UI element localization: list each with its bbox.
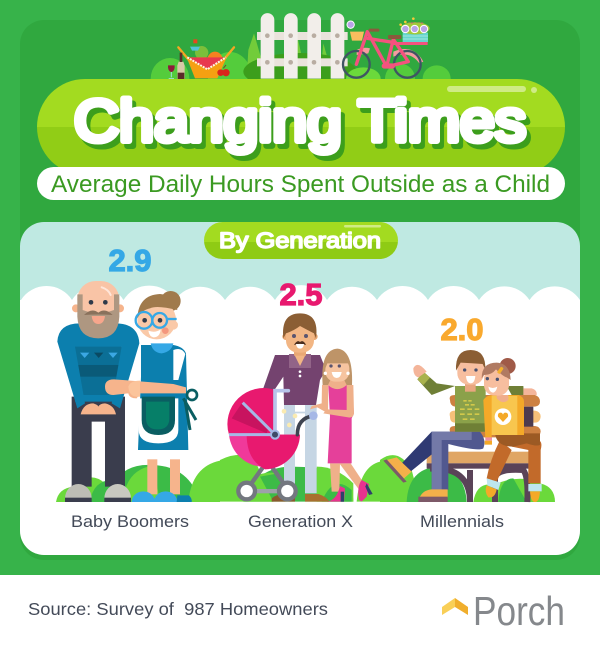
label: Millennials: Millennials <box>420 512 504 531</box>
icon: white picket fence <box>257 13 348 79</box>
value: 2.5: 2.5 <box>279 277 323 312</box>
pill: By Generation <box>204 222 398 259</box>
logo: Porch <box>442 588 565 634</box>
clouds and white panel body <box>20 285 580 555</box>
father <box>263 313 329 502</box>
title: Changing Times: Changing Times <box>74 89 526 154</box>
title: Changing Times: Changing Times <box>78 94 530 159</box>
title banner <box>37 79 565 200</box>
lime pill <box>37 79 565 175</box>
sky <box>20 222 580 300</box>
illustration: millennials couple on bench <box>380 350 555 502</box>
value: 2.9: 2.9 <box>108 243 152 278</box>
pill: By Generation: By Generation <box>219 228 381 253</box>
bench <box>427 395 541 502</box>
pill highlight <box>447 86 537 93</box>
label: Generation X: Generation X <box>248 512 353 531</box>
inner darker green panel <box>20 20 580 560</box>
subtitle pill: Average Daily Hours Spent Outside as a Child <box>51 171 550 198</box>
bushes <box>220 455 380 502</box>
girl <box>482 358 542 502</box>
stroller <box>227 388 318 499</box>
mother <box>310 349 373 502</box>
grandmother <box>105 291 197 502</box>
bushes behind the scene <box>151 33 451 105</box>
bushes <box>380 455 555 502</box>
boy <box>383 350 537 502</box>
illustration: generation x family with stroller <box>220 313 380 502</box>
icon: chevron <box>442 598 468 615</box>
bushes <box>56 461 220 502</box>
label: Baby Boomers: Baby Boomers <box>71 512 189 531</box>
illustration: baby boomers couple <box>56 281 220 502</box>
icon: picnic basket <box>168 39 234 79</box>
footer background <box>0 575 600 645</box>
logo: Porch: Porch <box>473 588 565 634</box>
icon: pink bicycle with flower basket <box>343 17 430 78</box>
garden scene <box>151 13 451 105</box>
grandfather <box>57 281 139 502</box>
panel: by generation <box>20 222 580 555</box>
source note: Source: Survey of 987 Homeowners <box>28 599 328 619</box>
value: 2.0: 2.0 <box>440 312 484 347</box>
